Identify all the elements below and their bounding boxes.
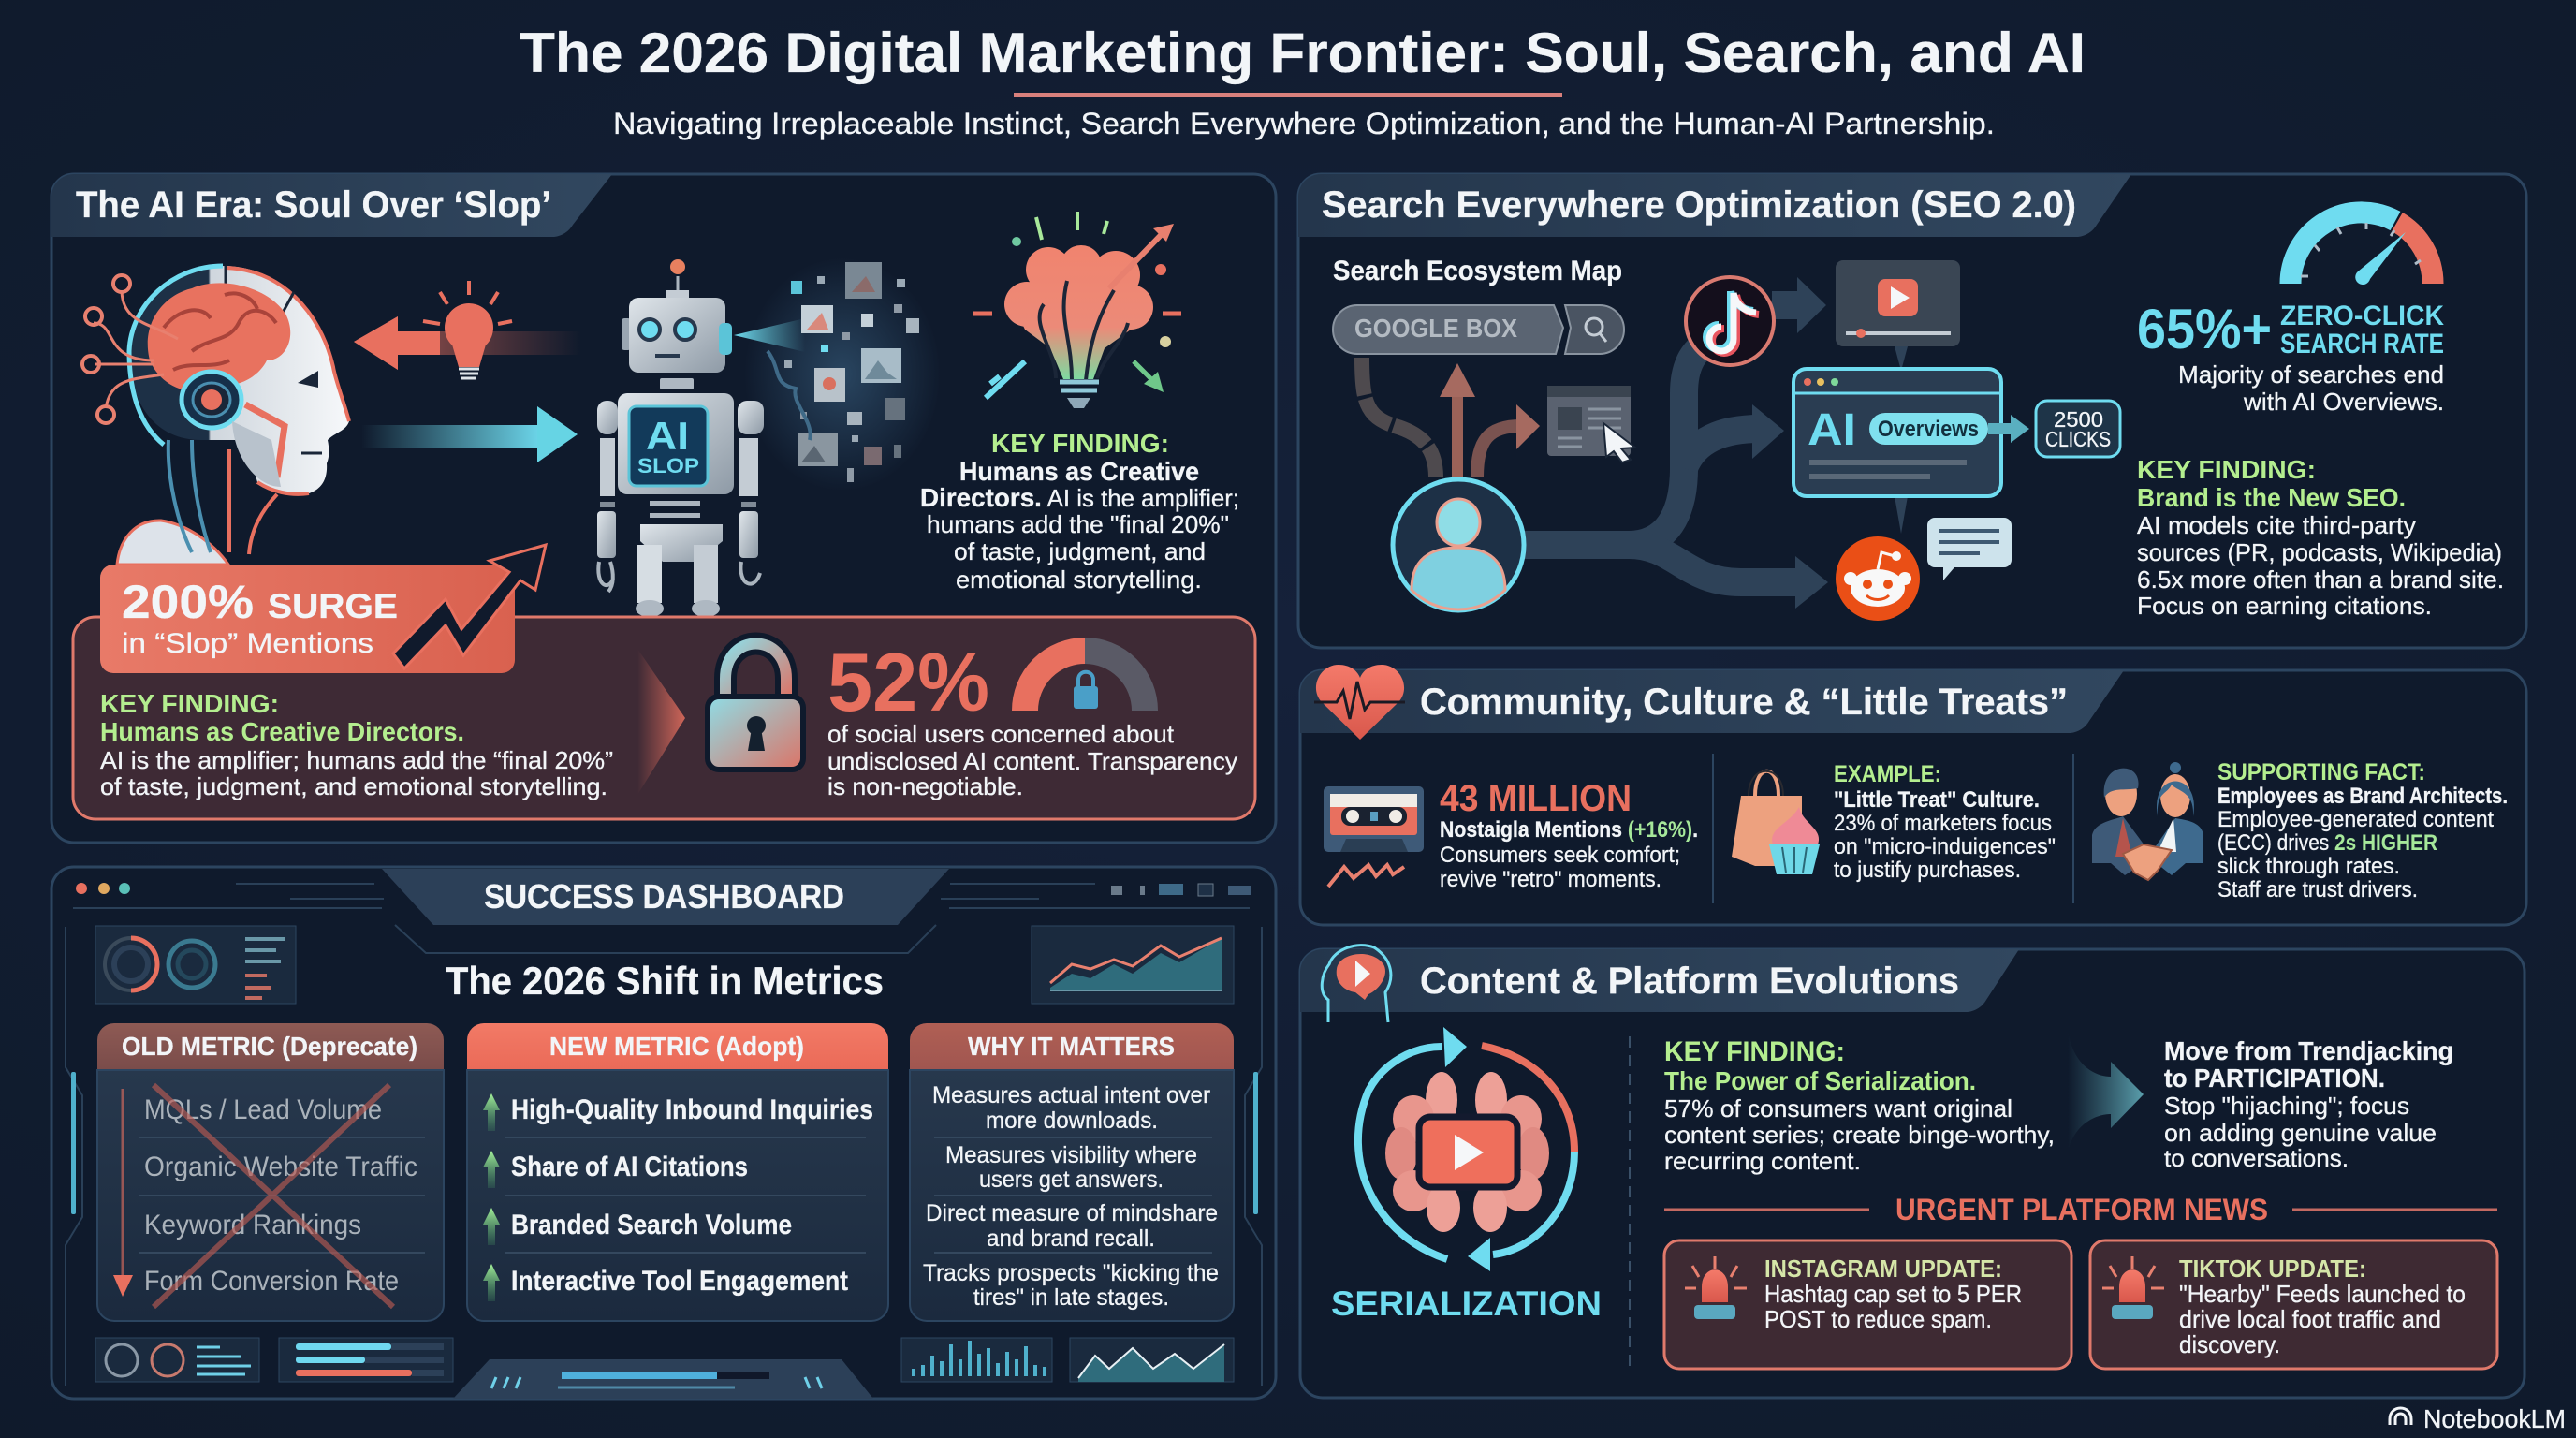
- text: key finding creative directors: KEY FINDING:: [991, 429, 1169, 458]
- text: 43 million: 43 MILLION: [1440, 778, 1632, 819]
- heading: shift in metrics: The 2026 Shift in Metrics: [446, 959, 884, 1003]
- callout: 2500 clicks: [2036, 401, 2120, 457]
- text: key finding brand: Brand is the New SEO.: [2137, 483, 2406, 512]
- mini widget: bottom gauges: [95, 1338, 259, 1382]
- column: new metric: Interactive Tool Engagement: [511, 1266, 848, 1297]
- heading: content platform: Content & Platform Evolutions: [1420, 961, 1959, 1002]
- column: why it matters: and brand recall.: [987, 1225, 1155, 1252]
- arrow: to clicks: [1988, 415, 2029, 443]
- icon: pixel slop cloud: [734, 257, 941, 492]
- card: tiktok update: "Hearby" Feeds launched to: [2179, 1280, 2466, 1308]
- callout: 2500 clicks: CLICKS: [2045, 427, 2111, 451]
- mini widget: bottom line chart: [1070, 1338, 1234, 1382]
- mini widget: gauges top left: [95, 926, 296, 1004]
- window dots: [76, 883, 130, 894]
- column: new metric: NEW METRIC (Adopt): [549, 1032, 804, 1061]
- text: key finding brand: [2137, 455, 2504, 620]
- column: new metric: [467, 1023, 888, 1321]
- column: old metric: [97, 1023, 444, 1321]
- text: key finding creative directors: humans add the "final 20%": [927, 510, 1229, 538]
- text: supporting fact: (ECC) drives 2s HIGHER: [2217, 830, 2437, 856]
- stat: 52 percent: 52%: [827, 636, 989, 728]
- column: new metric: High-Quality Inbound Inquiries: [511, 1094, 873, 1125]
- arrow: trendjacking: [2068, 1030, 2144, 1153]
- text: participation: to conversations.: [2164, 1144, 2349, 1172]
- arrow: instruction to robot: [361, 406, 578, 462]
- column: why it matters: users get answers.: [979, 1167, 1164, 1193]
- icon: cassette: [1324, 786, 1424, 852]
- mini widget: bottom bars: [279, 1338, 453, 1382]
- heading: community: Community, Culture & “Little Treats”: [1420, 682, 2068, 723]
- icon: google box: [1333, 305, 1624, 354]
- text: key finding brand: AI models cite third-party: [2137, 511, 2416, 539]
- card: instagram update: INSTAGRAM UPDATE:: [1764, 1255, 2002, 1283]
- panel: search everywhere: [1298, 174, 2526, 648]
- column: old metric: OLD METRIC (Deprecate): [122, 1032, 417, 1061]
- column: why it matters: WHY IT MATTERS: [968, 1032, 1175, 1061]
- icon: trend zigzag: [1328, 865, 1404, 887]
- side light bars: [71, 1072, 1258, 1214]
- column: why it matters: Measures visibility where: [945, 1142, 1197, 1168]
- text: supporting fact: SUPPORTING FACT:: [2217, 759, 2425, 785]
- text: participation: Stop "hijaching"; focus: [2164, 1092, 2409, 1120]
- panel: community culture: [1300, 665, 2526, 925]
- panel: the AI era: [51, 174, 1276, 843]
- card: tiktok update: discovery.: [2179, 1330, 2280, 1358]
- icon: speech bubble: [1927, 518, 2012, 580]
- text: example: EXAMPLE:: [1834, 761, 1941, 787]
- icon: AI overviews window: Overviews: [1878, 417, 1979, 442]
- column: old metric: Keyword Rankings: [144, 1210, 361, 1240]
- text: example: "Little Treat" Culture.: [1834, 787, 2040, 813]
- gauge: zero click: [2291, 213, 2433, 285]
- text: key finding serialization: KEY FINDING:: [1664, 1036, 1845, 1067]
- text: key finding creative directors: emotional storytelling.: [956, 565, 1202, 594]
- text: key finding creative directors: of taste, judgment, and: [954, 537, 1206, 565]
- stat: 65 percent plus: SEARCH RATE: [2280, 329, 2444, 360]
- stat: 65 percent plus: ZERO-CLICK: [2280, 301, 2444, 331]
- icon: user: [1393, 479, 1524, 610]
- heading: SEO 2.0: Search Everywhere Optimization (SEO 2.0): [1322, 184, 2076, 226]
- card: tiktok update: drive local foot traffic and: [2179, 1305, 2441, 1333]
- text: key finding brand: KEY FINDING:: [2137, 455, 2316, 484]
- subtitle: Navigating Irreplaceable Instinct, Search Everywhere Optimization, and the Human-AI Partnership.: [613, 107, 1995, 140]
- panel: success dashboard: [51, 867, 1276, 1399]
- text: example: on "micro-induigences": [1834, 834, 2056, 859]
- icon: employees handshake: [2092, 762, 2203, 880]
- icon: AI overviews window: AI: [1808, 405, 1856, 455]
- callout: 200 percent surge: [100, 545, 546, 673]
- text: serialization label: SERIALIZATION: [1331, 1284, 1602, 1323]
- text: supporting fact: slick through rates.: [2217, 854, 2400, 879]
- heading: urgent platform news: URGENT PLATFORM NEWS: [1895, 1193, 2268, 1226]
- status icons: [1111, 884, 1251, 896]
- arrows: new search flow: [1521, 305, 1802, 582]
- text: example: 23% of marketers focus: [1834, 811, 2052, 836]
- text: 43 million: Consumers seek comfort;: [1440, 843, 1680, 868]
- metric table: [97, 1023, 1234, 1321]
- icon: serialization cycle: [1358, 1027, 1574, 1271]
- icon: AI overviews window: [1793, 369, 2001, 496]
- icon: AI slop robot: SLOP: [637, 454, 699, 477]
- header: success dashboard: SUCCESS DASHBOARD: [484, 877, 844, 916]
- mini widget: bottom bar chart: [901, 1338, 1052, 1382]
- heading: SEO 2.0: [1298, 174, 2131, 237]
- mini widget: line chart top right: [1032, 926, 1234, 1004]
- text: supporting fact: [2217, 759, 2508, 902]
- arrow: idea from human: [354, 281, 581, 378]
- text: key finding brand: sources (PR, podcasts, Wikipedia): [2137, 538, 2502, 566]
- arrow: chevron: [637, 649, 685, 795]
- icon: idea brain bulb: [973, 212, 1181, 408]
- icon: siren: [1685, 1256, 1747, 1319]
- card: instagram update: Hashtag cap set to 5 PER: [1764, 1280, 2022, 1308]
- card: tiktok update: [2090, 1240, 2497, 1369]
- text: key finding brand: 6.5x more often than a brand site.: [2137, 565, 2504, 594]
- text: supporting fact: Employee-generated content: [2217, 807, 2494, 832]
- card: instagram update: POST to reduce spam.: [1764, 1305, 1992, 1333]
- text: 52 percent detail: undisclosed AI content. Transparency: [827, 747, 1237, 775]
- text: key finding bottom: KEY FINDING:: [100, 689, 279, 718]
- text: example: to justify purchases.: [1834, 858, 2021, 883]
- column: why it matters: tires" in late stages.: [973, 1284, 1169, 1311]
- icon: video player: [1836, 260, 1960, 346]
- text: participation: on adding genuine value: [2164, 1119, 2437, 1147]
- logo: NotebookLM: NotebookLM: [2423, 1404, 2566, 1433]
- text: search ecosystem map: Search Ecosystem Map: [1333, 256, 1622, 286]
- icon: AI slop robot: [597, 259, 764, 617]
- text: 43 million: [1440, 778, 1698, 892]
- text: participation: [2164, 1036, 2453, 1172]
- callout: 200 percent surge: in “Slop” Mentions: [122, 628, 373, 659]
- header: success dashboard: [382, 869, 949, 925]
- column: why it matters: [910, 1023, 1234, 1321]
- card: tiktok update: TIKTOK UPDATE:: [2179, 1255, 2366, 1283]
- title: The 2026 Digital Marketing Frontier: Soul, Search, and AI: [520, 22, 2086, 84]
- text: key finding bottom: AI is the amplifier; humans add the “final 20%”: [100, 746, 613, 774]
- column: why it matters: Tracks prospects "kicking the: [923, 1260, 1219, 1286]
- callout: 200 percent surge: SURGE: [268, 587, 398, 625]
- stat: 65 percent plus: 65%+: [2137, 298, 2272, 360]
- arrows: old search paths: [1362, 358, 1540, 477]
- gauge: 52 percent: [1025, 651, 1145, 711]
- text: 52 percent detail: [827, 720, 1237, 800]
- column: old metric: Organic Website Traffic: [144, 1152, 417, 1182]
- heading: community: [1300, 670, 2124, 733]
- text: key finding bottom: of taste, judgment, and emotional storytelling.: [100, 772, 607, 800]
- text: 43 million: revive "retro" moments.: [1440, 867, 1661, 892]
- text: key finding brand: Focus on earning citations.: [2137, 592, 2432, 620]
- icon: TikTok: [1686, 277, 1774, 365]
- text: key finding serialization: 57% of consumers want original: [1664, 1094, 2012, 1123]
- text: key finding creative directors: Directors. AI is the amplifier;: [920, 483, 1239, 512]
- text: key finding serialization: The Power of Serialization.: [1664, 1066, 1976, 1095]
- column: new metric: Branded Search Volume: [511, 1210, 792, 1240]
- text: example: [1834, 761, 2056, 883]
- icon: human AI head: [82, 266, 349, 565]
- column: why it matters: Measures actual intent over: [932, 1082, 1210, 1108]
- text: key finding bottom: Humans as Creative Directors.: [100, 717, 464, 746]
- stat: 65 percent plus: with AI Overviews.: [2243, 388, 2444, 416]
- column: old metric: Form Conversion Rate: [144, 1266, 399, 1297]
- text: supporting fact: Staff are trust drivers.: [2217, 877, 2418, 902]
- panel: content platform: [1300, 946, 2525, 1398]
- icon: head with play brain: [1322, 946, 1391, 1022]
- text: key finding creative directors: [920, 429, 1239, 594]
- heading: content platform: [1300, 949, 2019, 1012]
- stat: 65 percent plus: [2137, 298, 2444, 416]
- column: new metric: Share of AI Citations: [511, 1152, 748, 1182]
- icon: google box: GOOGLE BOX: [1354, 314, 1517, 343]
- footer console: [453, 1359, 873, 1399]
- icon: Reddit: [1836, 536, 1920, 621]
- icon: siren: [2102, 1256, 2164, 1319]
- text: 43 million: Nostaigla Mentions (+16%).: [1440, 817, 1698, 843]
- text: key finding serialization: content series; create binge-worthy,: [1664, 1121, 2055, 1149]
- text: 52 percent detail: of social users concerned about: [827, 720, 1175, 748]
- icon: heart: [1314, 665, 1405, 740]
- column: old metric: MQLs / Lead Volume: [144, 1094, 382, 1125]
- column: why it matters: more downloads.: [986, 1108, 1158, 1134]
- text: supporting fact: Employees as Brand Architects.: [2217, 784, 2508, 809]
- text: participation: to PARTICIPATION.: [2164, 1064, 2385, 1093]
- panel: red findings box: [73, 617, 1255, 819]
- icon: shopping bag and cupcake: [1732, 771, 1820, 874]
- column: why it matters: Direct measure of mindshare: [926, 1200, 1218, 1226]
- heading: AI era: [51, 174, 612, 237]
- callout: 200 percent surge: 200%: [122, 576, 254, 628]
- arrowheads: flow: [1752, 277, 1908, 609]
- text: participation: Move from Trendjacking: [2164, 1036, 2453, 1065]
- text: 52 percent detail: is non-negotiable.: [827, 772, 1023, 800]
- card: instagram update: [1664, 1240, 2071, 1369]
- stat: 65 percent plus: Majority of searches end: [2178, 360, 2444, 389]
- icon: padlock: [708, 644, 803, 770]
- text: key finding bottom: [100, 689, 613, 800]
- text: key finding serialization: [1664, 1036, 2055, 1175]
- text: key finding creative directors: Humans as Creative: [959, 457, 1199, 486]
- text: key finding serialization: recurring content.: [1664, 1147, 1861, 1175]
- callout: 2500 clicks: 2500: [2054, 407, 2103, 432]
- icon: AI slop robot: AI: [646, 414, 689, 458]
- heading: AI era: The AI Era: Soul Over ‘Slop’: [76, 184, 551, 226]
- icon: web window with cursor: [1547, 386, 1635, 462]
